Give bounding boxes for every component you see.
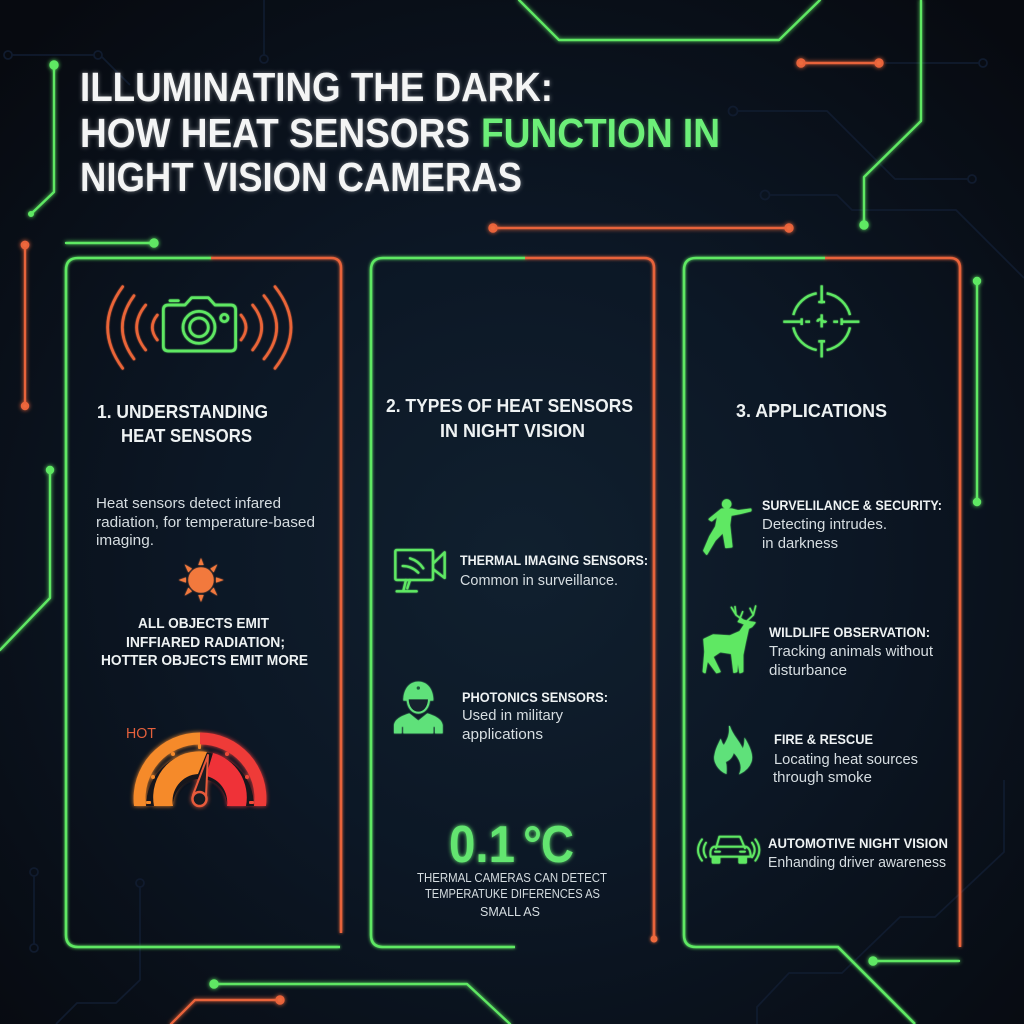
heading 1 <box>97 402 268 446</box>
icon: camera with heat waves <box>108 287 291 368</box>
icon: car with sensor waves <box>698 837 759 863</box>
surveillance text <box>762 498 942 552</box>
surveillance text: in darkness <box>762 536 838 552</box>
stat: 0.1 degrees C: C <box>541 816 574 874</box>
fire and rescue text: Locating heat sources <box>774 752 918 768</box>
photonics text: PHOTONICS SENSORS: <box>462 690 608 705</box>
circuit trace: orange left <box>22 242 28 409</box>
fire and rescue text: FIRE & RESCUE <box>774 732 873 747</box>
callout: all objects emit <box>101 616 308 669</box>
heading 2: 2. TYPES OF HEAT SENSORS <box>386 396 633 416</box>
icon: running figure <box>704 500 751 554</box>
body text 1: Heat sensors detect infared <box>96 495 281 512</box>
icon: thermal video camera <box>395 550 445 591</box>
body text 1: imaging. <box>96 532 154 549</box>
circuit trace: orange top right <box>798 60 882 66</box>
circuit trace: top-left green <box>29 62 58 216</box>
thermal imaging text <box>460 553 648 589</box>
automotive text: Enhanding driver awareness <box>768 855 946 871</box>
thermal imaging text: Common in surveillance. <box>460 573 618 589</box>
callout: all objects emit: INFFIARED RADIATION; <box>126 635 285 651</box>
heading 2 <box>386 396 633 441</box>
callout: all objects emit: HOTTER OBJECTS EMIT MORE <box>101 653 308 669</box>
panel 2: types of heat sensors <box>371 258 658 947</box>
body text 1: radiation, for temperature-based <box>96 514 315 531</box>
body text 1 <box>96 495 315 549</box>
circuit trace: orange bottom <box>171 996 284 1024</box>
title: HOW HEAT SENSORS <box>80 110 470 156</box>
stat caption: SMALL AS <box>480 905 540 919</box>
circuit trace: green above panel 1 <box>66 240 158 246</box>
circuit trace: green top hexagon <box>519 0 820 40</box>
heading 1: 1. UNDERSTANDING <box>97 402 268 422</box>
wildlife text <box>769 625 933 679</box>
circuit trace: green top right <box>860 0 921 228</box>
heading 1: HEAT SENSORS <box>121 426 252 446</box>
gauge label: HOT <box>126 725 156 742</box>
heading 2: IN NIGHT VISION <box>440 421 585 441</box>
icon: target crosshair <box>783 285 859 357</box>
panel 3 frame <box>684 258 960 1024</box>
photonics text <box>462 690 608 743</box>
title: ILLUMINATING THE DARK: <box>80 64 553 110</box>
icon: deer <box>703 606 756 673</box>
automotive text <box>768 836 948 871</box>
gauge: hot <box>126 725 266 806</box>
stat: 0.1 degrees C: 0.1 <box>449 816 515 874</box>
icon: soldier <box>394 682 443 733</box>
panel 1: understanding heat sensors <box>66 258 341 947</box>
thermal imaging text: THERMAL IMAGING SENSORS: <box>460 553 648 568</box>
wildlife text: Tracking animals without <box>769 644 933 660</box>
circuit trace: green left <box>0 467 53 650</box>
wildlife text: disturbance <box>769 663 847 679</box>
title: NIGHT VISION CAMERAS <box>80 154 522 200</box>
photonics text: Used in military <box>462 708 564 724</box>
icon: flame <box>715 726 752 773</box>
fire and rescue text <box>773 732 918 786</box>
panel 3: applications <box>684 258 960 1024</box>
automotive text: AUTOMOTIVE NIGHT VISION <box>768 836 948 851</box>
wildlife text: WILDLIFE OBSERVATION: <box>769 625 930 640</box>
stat caption: TEMPERATUKE DIFERENCES AS <box>425 887 600 901</box>
icon: sun <box>179 558 224 602</box>
circuit trace: green bottom right <box>870 958 959 964</box>
gauge dial <box>134 732 266 806</box>
fire and rescue text: through smoke <box>773 770 872 786</box>
surveillance text: Detecting intrudes. <box>762 517 887 533</box>
photonics text: applications <box>462 727 543 743</box>
stat caption <box>417 871 607 919</box>
panel 1 frame <box>66 258 341 947</box>
stat: 0.1 degrees C: ° <box>523 816 542 874</box>
callout: all objects emit: ALL OBJECTS EMIT <box>138 616 269 632</box>
stat caption: THERMAL CAMERAS CAN DETECT <box>417 871 607 885</box>
circuit trace: green bottom <box>210 980 510 1024</box>
panel 2 frame <box>371 258 658 947</box>
circuit trace: orange above panel 2 <box>490 224 792 232</box>
title: FUNCTION IN <box>481 110 720 156</box>
title <box>80 64 720 200</box>
heading 3: 3. APPLICATIONS <box>736 401 887 421</box>
surveillance text: SURVELILANCE & SECURITY: <box>762 498 942 513</box>
circuit trace: green right <box>974 278 980 505</box>
